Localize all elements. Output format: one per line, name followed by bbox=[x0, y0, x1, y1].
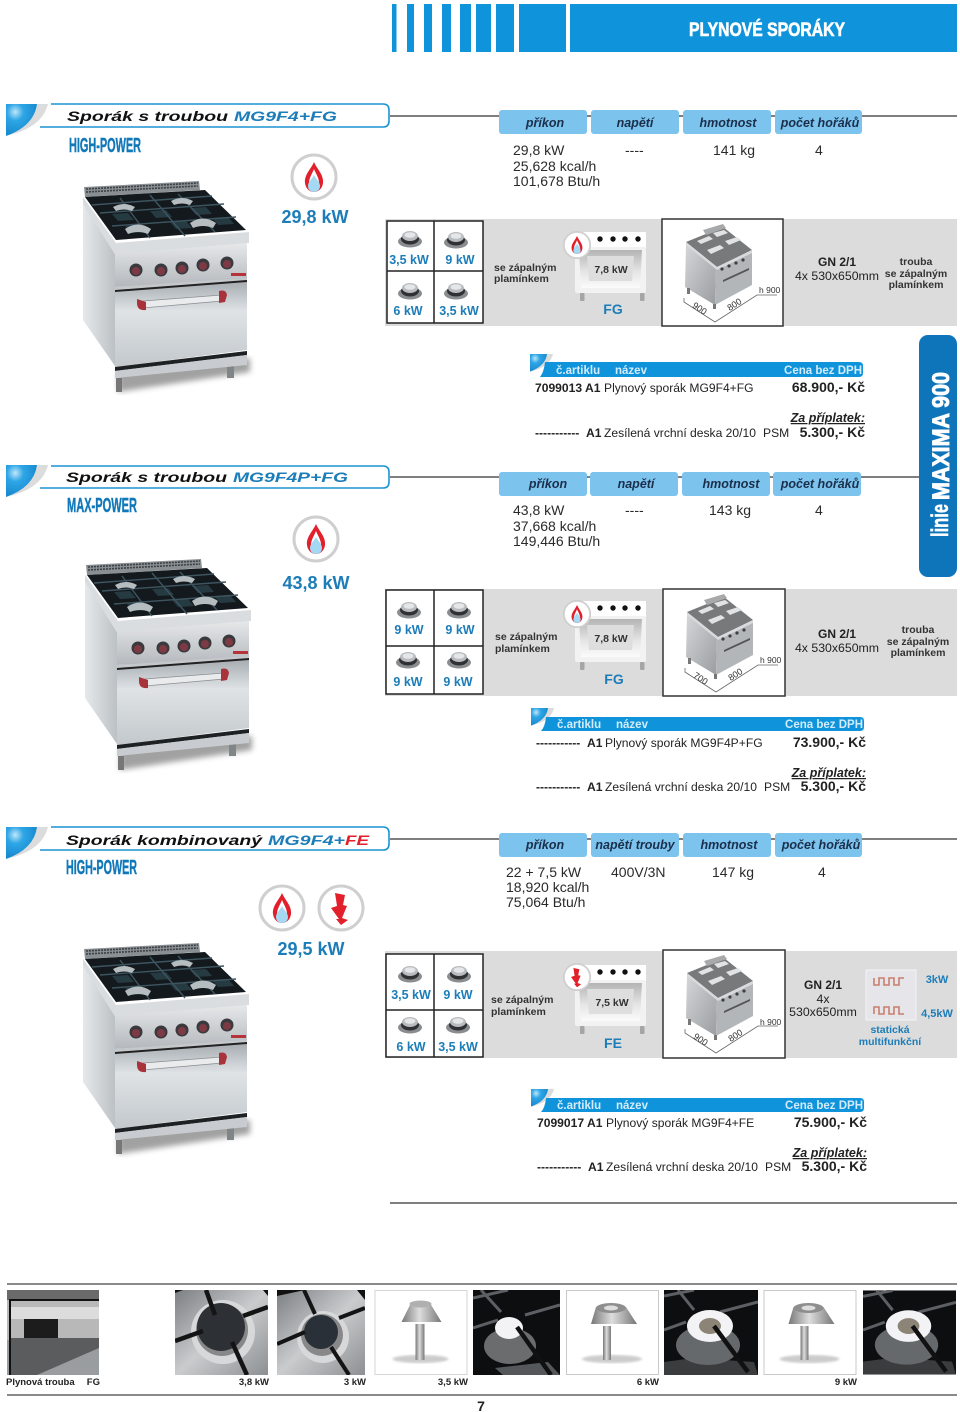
dimensions diagram bbox=[662, 219, 783, 326]
oven diagram: FG bbox=[604, 671, 624, 687]
photo: 3,5 kW burner bbox=[473, 1290, 560, 1375]
stove photo bbox=[85, 559, 252, 770]
heating elements diagram: 4,5kW bbox=[921, 1008, 954, 1020]
spec table bbox=[499, 472, 861, 549]
gallery captions: 6 kW bbox=[637, 1377, 659, 1388]
dimensions diagram: 800 bbox=[726, 666, 744, 683]
panel: product MG9F4P+FG bbox=[6, 465, 957, 794]
burner grid: 9 kW bbox=[394, 623, 424, 637]
price table: A1 bbox=[588, 1160, 604, 1174]
spec table: 75,064 Btu/h bbox=[506, 894, 585, 910]
photo: 9 kW part bbox=[764, 1290, 856, 1374]
price table: Plynový sporák MG9F4+FE bbox=[606, 1116, 754, 1130]
burner grid: 3,5 kW bbox=[438, 1040, 478, 1054]
price table: č.artiklu bbox=[557, 1100, 601, 1112]
dimensions diagram: 800 bbox=[725, 296, 743, 313]
spec table: 37,668 kcal/h bbox=[513, 518, 596, 534]
feature strip: se zápalným bbox=[494, 262, 556, 274]
price table: A1 bbox=[587, 780, 603, 794]
side tab: linie MAXIMA 900: MAXIMA 900 bbox=[928, 372, 955, 500]
price table: Cena bez DPH bbox=[785, 719, 863, 731]
price table: Za příplatek: bbox=[791, 766, 866, 780]
burner grid: 3,5 kW bbox=[391, 988, 431, 1002]
heating elements diagram: multifunkční bbox=[859, 1036, 922, 1048]
feature strip: GN 2/1 bbox=[804, 978, 842, 992]
burner grid: 6 kW bbox=[393, 304, 423, 318]
gallery captions: 3 kW bbox=[344, 1377, 366, 1388]
photo: gas oven bbox=[7, 1290, 99, 1375]
price table: 5.300,- Kč bbox=[801, 778, 866, 794]
burner grid bbox=[387, 221, 483, 323]
spec table: 4 bbox=[815, 142, 823, 158]
burner grid bbox=[386, 954, 483, 1057]
dimensions diagram: 800 bbox=[726, 1027, 744, 1044]
power value: 43,8 kW bbox=[282, 573, 350, 593]
dimensions diagram bbox=[663, 589, 785, 696]
feature strip: trouba bbox=[900, 256, 932, 268]
title bar: Sporák s troubou bbox=[67, 108, 229, 124]
feature strip: GN 2/1 bbox=[818, 255, 856, 269]
feature strip: 4x 530x650mm bbox=[795, 641, 879, 655]
price table: Za příplatek: bbox=[790, 411, 865, 425]
burner grid: 6 kW bbox=[396, 1040, 426, 1054]
title bar: MG9F4P+FG bbox=[233, 469, 348, 485]
section rule lines bbox=[390, 116, 957, 1203]
panel: burner gallery bbox=[6, 1284, 957, 1395]
spec table: 25,628 kcal/h bbox=[513, 158, 596, 174]
spec table bbox=[499, 110, 862, 189]
oven diagram: FE bbox=[604, 1035, 622, 1051]
spec table: 141 kg bbox=[713, 142, 755, 158]
title bar bbox=[6, 104, 389, 136]
title bar bbox=[6, 827, 389, 859]
power value: 29,8 kW bbox=[281, 207, 349, 227]
spec table: příkon bbox=[525, 116, 564, 130]
spec table: 29,8 kW bbox=[513, 142, 565, 158]
feature strip: plamínkem bbox=[494, 273, 549, 285]
price table: č.artiklu bbox=[556, 365, 600, 377]
photo: 3,8 kW burner bbox=[175, 1290, 268, 1375]
gallery captions: FG bbox=[87, 1377, 100, 1388]
spec table bbox=[499, 833, 862, 910]
spec table: napětí bbox=[617, 116, 655, 130]
price table: ----------- bbox=[536, 736, 580, 750]
feature strip: se zápalným bbox=[885, 268, 947, 280]
feature strip: se zápalným bbox=[491, 994, 553, 1006]
title bar: FE bbox=[345, 832, 370, 848]
price table: č.artiklu bbox=[557, 719, 601, 731]
spec table: hmotnost bbox=[700, 116, 757, 130]
gallery captions bbox=[6, 1377, 857, 1388]
dimensions diagram: h 900 bbox=[760, 1017, 782, 1027]
spec table: ---- bbox=[625, 142, 644, 158]
spec table: hmotnost bbox=[703, 477, 760, 491]
icon: gas flame bbox=[292, 155, 336, 199]
price table: A1 bbox=[586, 426, 602, 440]
feature strip: 4x 530x650mm bbox=[795, 269, 879, 283]
title bar: Sporák s troubou bbox=[66, 469, 228, 485]
feature strip: GN 2/1 bbox=[818, 627, 856, 641]
oven diagram: 7,8 kW bbox=[594, 264, 628, 276]
photo: 6 kW burner bbox=[664, 1290, 758, 1375]
feature strip bbox=[385, 589, 957, 696]
feature strip: se zápalným bbox=[495, 631, 557, 643]
photo: 3,5 kW part bbox=[375, 1290, 467, 1374]
price table bbox=[531, 1089, 867, 1174]
side tab: linie MAXIMA 900 bbox=[919, 335, 957, 577]
spec table: 22 + 7,5 kW bbox=[506, 864, 582, 880]
price table: Zesílená vrchní deska 20/10 bbox=[606, 1160, 758, 1174]
price table: Plynový sporák MG9F4+FG bbox=[604, 381, 754, 395]
dimensions diagram: 700 bbox=[692, 670, 710, 687]
price table bbox=[530, 354, 865, 440]
gallery captions: Plynová trouba bbox=[6, 1377, 75, 1388]
spec table: ---- bbox=[625, 502, 644, 518]
dimensions diagram: h 900 bbox=[760, 655, 782, 665]
stove photo bbox=[83, 943, 250, 1154]
price table: Cena bez DPH bbox=[784, 365, 862, 377]
spec table: 147 kg bbox=[712, 864, 754, 880]
dimensions diagram bbox=[663, 950, 785, 1058]
spec table: počet hořáků bbox=[780, 116, 860, 130]
price table: 73.900,- Kč bbox=[793, 734, 866, 750]
oven diagram bbox=[564, 232, 646, 317]
photo: 9 kW burner bbox=[863, 1290, 956, 1375]
oven diagram bbox=[564, 964, 646, 1051]
icon: gas flame bbox=[260, 886, 304, 930]
price table: ----------- bbox=[535, 426, 579, 440]
heading: plynové sporáky: PLYNOVÉ SPORÁKY bbox=[689, 19, 845, 41]
price table: 75.900,- Kč bbox=[794, 1114, 867, 1130]
heating elements diagram: statická bbox=[870, 1024, 910, 1036]
title bar: MG9F4+ bbox=[268, 832, 345, 848]
burner grid bbox=[386, 590, 483, 694]
spec table: počet hořáků bbox=[780, 477, 860, 491]
spec table: napětí trouby bbox=[595, 838, 676, 852]
feature strip: 530x650mm bbox=[789, 1005, 857, 1019]
burner grid: 3,5 kW bbox=[439, 304, 479, 318]
price table: Cena bez DPH bbox=[785, 1100, 863, 1112]
price table: název bbox=[616, 719, 649, 731]
panel: product MG9F4+FG bbox=[6, 104, 957, 440]
oven diagram: 7,8 kW bbox=[594, 633, 628, 645]
feature strip bbox=[385, 950, 957, 1058]
spec table: 400V/3N bbox=[611, 864, 665, 880]
dimensions diagram: 900 bbox=[691, 300, 709, 317]
feature strip: plamínkem bbox=[491, 1006, 546, 1018]
subtitle: high-power: HIGH-POWER bbox=[66, 857, 137, 879]
header banner bbox=[392, 4, 957, 52]
feature strip bbox=[385, 219, 957, 326]
price table: Zesílená vrchní deska 20/10 bbox=[604, 426, 756, 440]
spec table: 18,920 kcal/h bbox=[506, 879, 589, 895]
gallery captions: 3,8 kW bbox=[239, 1377, 269, 1388]
gallery captions: 3,5 kW bbox=[438, 1377, 468, 1388]
price table: ----------- bbox=[537, 1160, 581, 1174]
dimensions diagram: h 900 bbox=[759, 285, 781, 295]
burner grid: 9 kW bbox=[443, 988, 473, 1002]
spec table: 101,678 Btu/h bbox=[513, 173, 600, 189]
header stripes bbox=[392, 4, 566, 52]
spec table: příkon bbox=[525, 838, 564, 852]
price table: PSM bbox=[765, 1160, 791, 1174]
burner grid: 3,5 kW bbox=[389, 253, 429, 267]
feature strip: trouba bbox=[902, 624, 934, 636]
power value: 29,5 kW bbox=[277, 939, 345, 959]
price table: název bbox=[615, 365, 648, 377]
feature strip: plamínkem bbox=[891, 647, 945, 659]
icon: gas flame bbox=[294, 517, 338, 561]
gallery captions: 9 kW bbox=[835, 1377, 857, 1388]
spec table: napětí bbox=[618, 477, 656, 491]
oven diagram: FG bbox=[603, 301, 623, 317]
price table: Plynový sporák MG9F4P+FG bbox=[605, 736, 763, 750]
stove photo bbox=[83, 181, 250, 392]
oven diagram bbox=[564, 601, 646, 687]
price table: Zesílená vrchní deska 20/10 bbox=[605, 780, 757, 794]
panel: product MG9F4+FE bbox=[6, 827, 957, 1174]
photo: 3 kW burner bbox=[277, 1290, 365, 1375]
title bar: MG9F4+FG bbox=[234, 108, 337, 124]
spec table: 149,446 Btu/h bbox=[513, 533, 600, 549]
price table: 7099013 A1 bbox=[535, 381, 601, 395]
spec table: příkon bbox=[528, 477, 567, 491]
spec table: 4 bbox=[818, 864, 826, 880]
heating elements diagram: 3kW bbox=[926, 974, 949, 986]
price table: PSM bbox=[763, 426, 789, 440]
subtitle: max-power: MAX-POWER bbox=[67, 495, 137, 517]
price table: Za příplatek: bbox=[792, 1146, 867, 1160]
spec table: 43,8 kW bbox=[513, 502, 565, 518]
price table: 68.900,- Kč bbox=[792, 379, 865, 395]
feature strip: se zápalným bbox=[887, 636, 949, 648]
header bar bbox=[570, 4, 957, 52]
burner grid: 9 kW bbox=[443, 675, 473, 689]
spec table: 143 kg bbox=[709, 502, 751, 518]
price table: 5.300,- Kč bbox=[802, 1158, 867, 1174]
price table: PSM bbox=[764, 780, 790, 794]
price table: 7099017 A1 bbox=[537, 1116, 603, 1130]
subtitle: high-power: HIGH-POWER bbox=[69, 135, 141, 157]
title bar bbox=[6, 465, 389, 497]
feature strip: 4x bbox=[816, 992, 830, 1006]
oven diagram: 7,5 kW bbox=[595, 997, 629, 1009]
burner grid: 9 kW bbox=[393, 675, 423, 689]
dimensions diagram: 900 bbox=[692, 1031, 710, 1048]
photo: 6 kW part bbox=[566, 1290, 658, 1374]
spec table: hmotnost bbox=[701, 838, 758, 852]
price table: ----------- bbox=[536, 780, 580, 794]
spec table: počet hořáků bbox=[781, 838, 861, 852]
title bar: Sporák kombinovaný bbox=[66, 832, 264, 848]
spec table: 4 bbox=[815, 502, 823, 518]
burner grid: 9 kW bbox=[445, 253, 475, 267]
price table: 5.300,- Kč bbox=[800, 424, 865, 440]
side tab: linie MAXIMA 900: linie bbox=[927, 504, 954, 537]
price table: název bbox=[616, 1100, 649, 1112]
burner grid: 9 kW bbox=[445, 623, 475, 637]
price table: A1 bbox=[587, 736, 603, 750]
feature strip: plamínkem bbox=[889, 279, 943, 291]
feature strip: plamínkem bbox=[495, 643, 550, 655]
icon: electric bolt bbox=[319, 886, 363, 930]
price table bbox=[531, 708, 866, 794]
heating elements diagram bbox=[859, 970, 954, 1048]
